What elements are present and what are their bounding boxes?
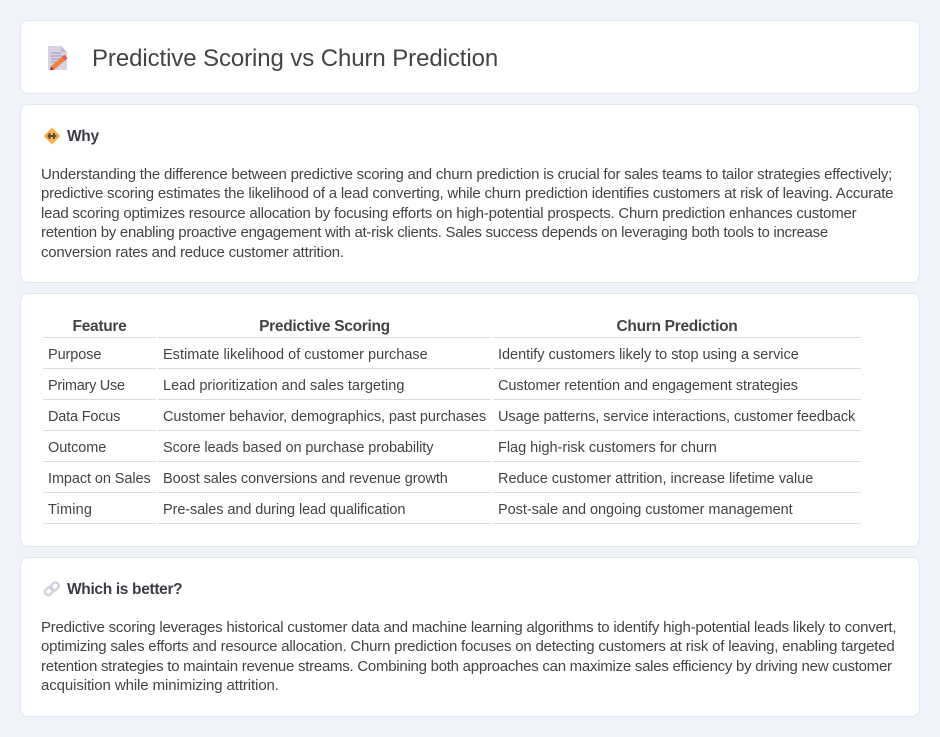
text block: why explanation: retention by enabling proactive engagement with at-risk clients. Sales success depends on leveraging both tools to increase (41, 224, 828, 241)
table row: data focus: Data Focus (48, 409, 120, 425)
table row: data focus (43, 409, 861, 431)
table row: primary use: Customer retention and engagement strategies (498, 378, 798, 394)
table row: outcome: Score leads based on purchase probability (163, 440, 433, 456)
icon: chain link (44, 581, 60, 596)
table row: impact on sales (43, 471, 861, 493)
table row: purpose: Purpose (48, 347, 101, 363)
text block: why explanation: conversion rates and reduce customer attrition. (41, 244, 344, 261)
table row: purpose: Estimate likelihood of customer purchase (163, 347, 428, 363)
table row: primary use (43, 378, 861, 400)
table row: impact on sales: Reduce customer attrition, increase lifetime value (498, 471, 813, 487)
table row: outcome: Flag high-risk customers for churn (498, 440, 717, 456)
panel: why (20, 104, 920, 283)
table row: impact on sales: Impact on Sales (48, 471, 151, 487)
text block: which is better explanation: retention strategies to maintain revenue streams. Combining both approaches can maximize sales efficiency by driving new customer (41, 658, 892, 675)
icon: warning diamond (44, 128, 60, 144)
table row: outcome: Outcome (48, 440, 106, 456)
table row: timing: Pre-sales and during lead qualification (163, 502, 405, 518)
text block: why explanation: Understanding the difference between predictive scoring and churn prediction is crucial for sales teams to tailor strategies effectively; (41, 166, 892, 183)
table row: timing: Post-sale and ongoing customer management (498, 502, 793, 518)
table row: impact on sales: Boost sales conversions and revenue growth (163, 471, 448, 487)
text block: which is better explanation (41, 619, 896, 694)
text block: why explanation: predictive scoring estimates the likelihood of a lead converting, while churn prediction identifies customers at risk of leaving. Accurate (41, 185, 893, 202)
panel: which is better (20, 557, 920, 717)
table row: primary use: Lead prioritization and sales targeting (163, 378, 404, 394)
table row: outcome (43, 440, 861, 462)
table row: primary use: Primary Use (48, 378, 125, 394)
icon: document with pencil (48, 46, 68, 70)
text block: why explanation: lead scoring optimizes resource allocation by focusing efforts on high-potential prospects. Churn prediction enhances customer (41, 205, 856, 222)
table row: timing: Timing (48, 502, 92, 518)
table row: timing (43, 502, 861, 524)
table header: Predictive Scoring (259, 318, 390, 335)
text block: which is better explanation: optimizing sales efforts and resource allocation. Churn prediction focuses on detecting customers at risk of leaving, enabling targeted (41, 638, 895, 655)
table header: Feature (73, 318, 126, 335)
text block: which is better explanation: acquisition while minimizing attrition. (41, 677, 279, 694)
title: Predictive Scoring vs Churn Prediction (92, 45, 498, 72)
table row: data focus: Usage patterns, service interactions, customer feedback (498, 409, 855, 425)
table row: data focus: Customer behavior, demographics, past purchases (163, 409, 486, 425)
table header: Churn Prediction (617, 318, 737, 335)
table header (43, 318, 861, 338)
panel: title header (20, 20, 920, 94)
text block: which is better explanation: Predictive scoring leverages historical customer data and machine learning algorithms to identify high-potential leads likely to convert, (41, 619, 896, 636)
text block: why explanation (41, 166, 893, 261)
table row: purpose (43, 347, 861, 369)
panel: comparison table (20, 293, 920, 547)
heading: which is better: Which is better? (67, 581, 182, 598)
table row: purpose: Identify customers likely to stop using a service (498, 347, 799, 363)
heading: why: Why (67, 128, 99, 145)
